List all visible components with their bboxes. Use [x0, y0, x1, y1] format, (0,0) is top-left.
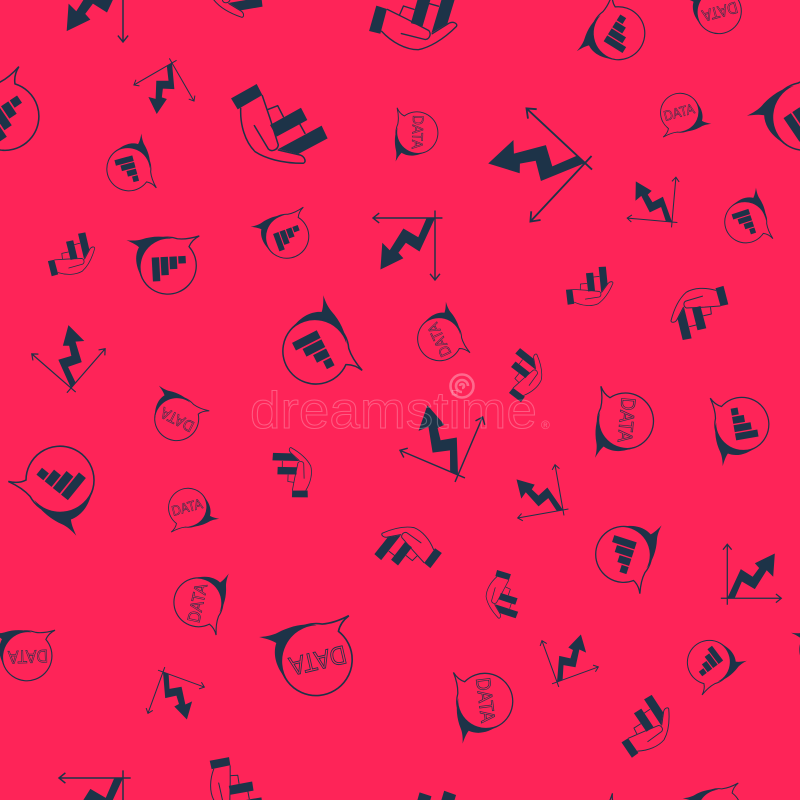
icon: hand holding bars: [259, 441, 325, 504]
icon: chart bubble large: [0, 404, 138, 578]
icon: DATA bubble: DATA: [158, 403, 197, 434]
icon: DATA bubble: [369, 93, 448, 172]
icon: hand holding bars: [474, 565, 535, 627]
icon: chart bubble: [113, 200, 221, 308]
icon: falling arrow chart bottom: [59, 770, 131, 800]
icon: falling arrow chart: [131, 56, 199, 123]
icon: growth arrow chart mirrored: [397, 392, 490, 485]
icon: growth arrow chart mirrored: [510, 464, 569, 523]
icon: growth arrow chart mirrored: [627, 173, 681, 228]
icon: chart bubble: [571, 494, 699, 622]
icon: chart bubble: [659, 614, 771, 725]
icon: growth arrow chart: [721, 544, 781, 605]
watermark registered mark: ®: [541, 418, 550, 432]
icon: hand holding bars bottom: [196, 752, 274, 800]
icon: chart bubble top: [543, 0, 675, 94]
icon: DATA bubble: DATA: [408, 115, 426, 150]
icon: growth arrow chart: [28, 315, 110, 397]
icon: hand holding bars: [494, 343, 552, 405]
icon: hand holding bars: [44, 225, 98, 285]
icon: DATA bubble right wrap: [780, 599, 800, 692]
icon: DATA bubble: DATA: [425, 320, 455, 359]
icon: chart bubble: [706, 171, 800, 267]
icon: DATA bubble: [417, 646, 530, 759]
icon: chart bubble right edge: [712, 19, 800, 190]
icon: DATA bubble: [147, 472, 233, 559]
icon: hand holding bars: [368, 515, 446, 586]
icon: chart bubble left edge: [0, 19, 83, 190]
icon: chart bubble: [233, 177, 335, 279]
icon: DATA bubble: DATA: [471, 677, 498, 724]
icon: hand holding bars: [618, 694, 673, 759]
icon: DATA bubble: DATA: [170, 495, 205, 519]
icon: DATA bubble: [155, 552, 261, 657]
icon: falling arrow chart: [373, 211, 442, 280]
icon: hand holding bars top: [360, 0, 472, 72]
icon: DATA bubble: DATA: [613, 397, 639, 444]
icon: DATA bubble large: [235, 567, 391, 724]
icon: DATA bubble bottom wrap: [667, 752, 766, 800]
icon: hand holding bars: [561, 256, 618, 318]
icon: DATA bubble: [395, 282, 501, 388]
icon: hand holding bars top wrap: [196, 0, 274, 22]
icon: growth arrow chart: [537, 626, 600, 689]
watermark logo spiral: [450, 374, 474, 398]
icon: DATA bubble: [127, 357, 234, 464]
icon: DATA bubble left edge: DATA: [8, 646, 48, 667]
icon: falling arrow chart mirrored: [143, 665, 206, 728]
icon: falling arrow chart top wrap: [59, 0, 131, 42]
icon: chart bubble: [89, 118, 186, 215]
icon: DATA bubble left edge: [0, 599, 73, 692]
icon: chart bubble: [674, 370, 788, 483]
watermark text: dreamstime: [250, 382, 537, 440]
icon: DATA bubble: [559, 365, 669, 475]
icon: chart bubble large: [247, 265, 408, 425]
icon: DATA bubble: [639, 77, 725, 164]
icon: hand holding bars large: [231, 84, 328, 163]
icon: DATA bubble large: DATA: [286, 640, 349, 680]
icon: hand holding bars: [667, 275, 732, 349]
icon: DATA bubble top: [667, 0, 766, 52]
icon: hand holding bars bottom wrap: [360, 760, 472, 800]
icon: large arrow chart pointing left: [472, 101, 599, 228]
icon: chart bubble bottom wrap: [543, 761, 675, 800]
icon: DATA bubble: DATA: [184, 582, 211, 624]
icon: DATA bubble: DATA: [662, 100, 697, 124]
